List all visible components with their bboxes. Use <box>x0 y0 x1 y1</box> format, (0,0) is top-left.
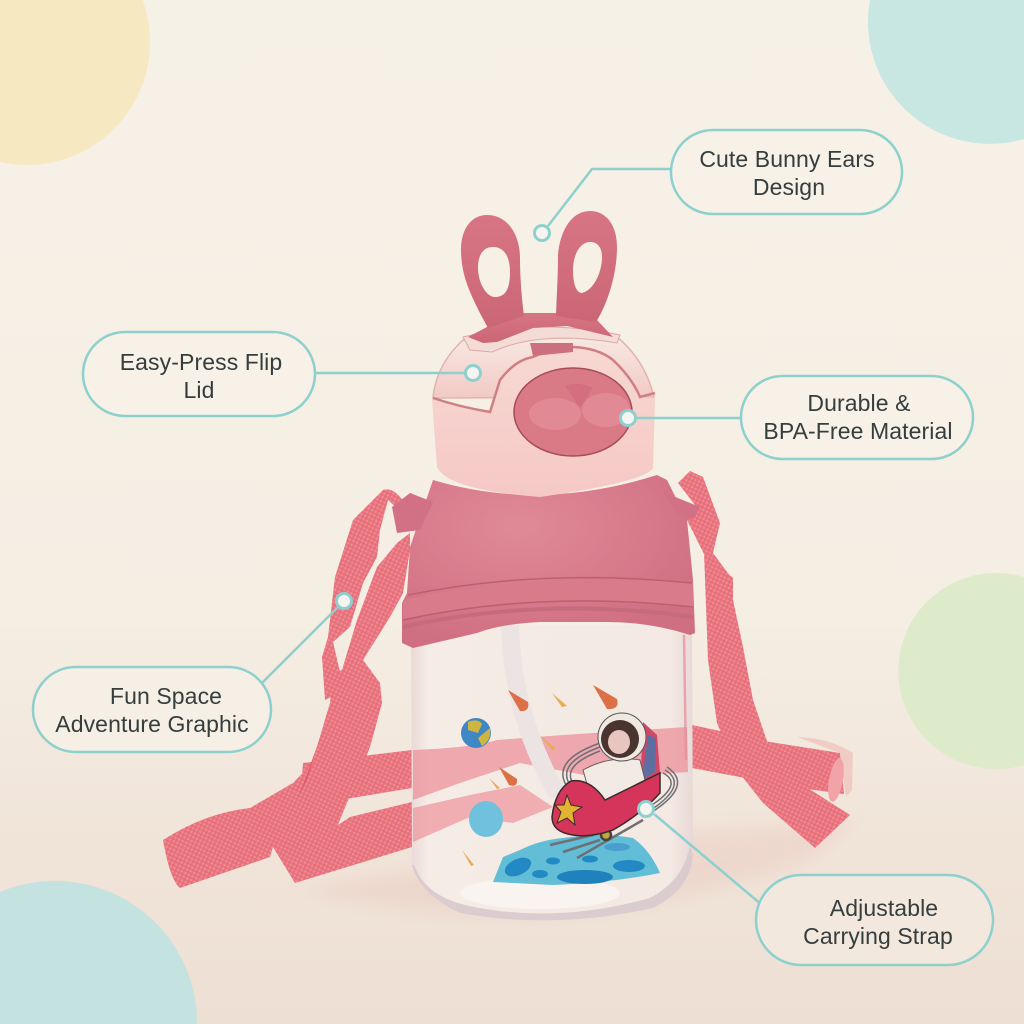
space adventure graphic <box>461 685 678 885</box>
bottle product illustration <box>163 211 860 920</box>
pink collar with arch <box>432 347 655 497</box>
left strap: main hanging band <box>273 533 410 883</box>
callout: Easy-Press Flip Lid: Easy-Press Flip <box>120 349 282 375</box>
bunny ears and bridge <box>461 211 620 356</box>
strap seen through bottle <box>413 727 688 800</box>
callout: Fun Space Adventure Graphic: Fun Space <box>110 683 222 709</box>
callout: Durable and BPA-Free Material <box>741 376 973 459</box>
rocket body with star <box>552 773 660 836</box>
callout: Durable and BPA-Free Material: Durable & <box>807 390 911 416</box>
earth planet <box>461 718 491 748</box>
callout: Cute Bunny Ears Design: Cute Bunny Ears <box>699 146 875 172</box>
floor shadow <box>300 820 860 914</box>
left strap: outer loop band <box>163 735 345 888</box>
meteors <box>462 685 618 866</box>
lower lid with ridges <box>402 475 695 648</box>
decorative circle: teal top right <box>868 0 1024 144</box>
callout: Fun Space Adventure Graphic: Adventure Graphic <box>55 711 249 737</box>
left strap: dark inner fold <box>283 680 350 860</box>
right strap <box>678 471 850 848</box>
decorative circle: green right <box>898 573 1024 769</box>
decorative circle: teal bottom left <box>0 881 197 1024</box>
callout: Easy-Press Flip Lid <box>83 332 315 416</box>
callout: Cute Bunny Ears Design: Design <box>753 174 825 200</box>
callout: Cute Bunny Ears Design <box>671 130 902 214</box>
bunny nose push button <box>514 368 632 456</box>
anchor dot: bunny ears <box>534 226 550 240</box>
anchor dot: material <box>620 410 636 426</box>
anchor dot: flip lid <box>466 366 480 380</box>
moon <box>493 835 660 885</box>
rear strap: bands behind bottle <box>295 725 853 883</box>
blue planet <box>469 801 503 837</box>
callout leader lines and anchor dots <box>262 169 762 905</box>
right strap tab <box>663 492 700 520</box>
left strap: upper folded band <box>322 489 407 700</box>
astronaut and seat <box>583 713 660 802</box>
callout: Easy-Press Flip Lid: Lid <box>184 377 214 403</box>
callout: Adjustable Carrying Strap <box>756 875 993 965</box>
straw <box>510 625 558 795</box>
left strap tab <box>392 493 433 533</box>
clear bottle body <box>411 625 693 920</box>
callout: Durable and BPA-Free Material: BPA-Free Material <box>763 418 953 444</box>
callout: Fun Space Adventure Graphic <box>33 667 271 752</box>
callout: Adjustable Carrying Strap: Adjustable <box>830 895 938 921</box>
dome rim lines <box>433 347 655 412</box>
decorative circle: yellow top left <box>0 0 150 165</box>
callout: Adjustable Carrying Strap: Carrying Strap <box>803 923 953 949</box>
clear flip dome <box>433 337 654 398</box>
rocket sled rails and coils <box>550 743 678 858</box>
anchor dot: strap <box>638 802 654 816</box>
anchor dot: space graphic <box>336 594 352 608</box>
